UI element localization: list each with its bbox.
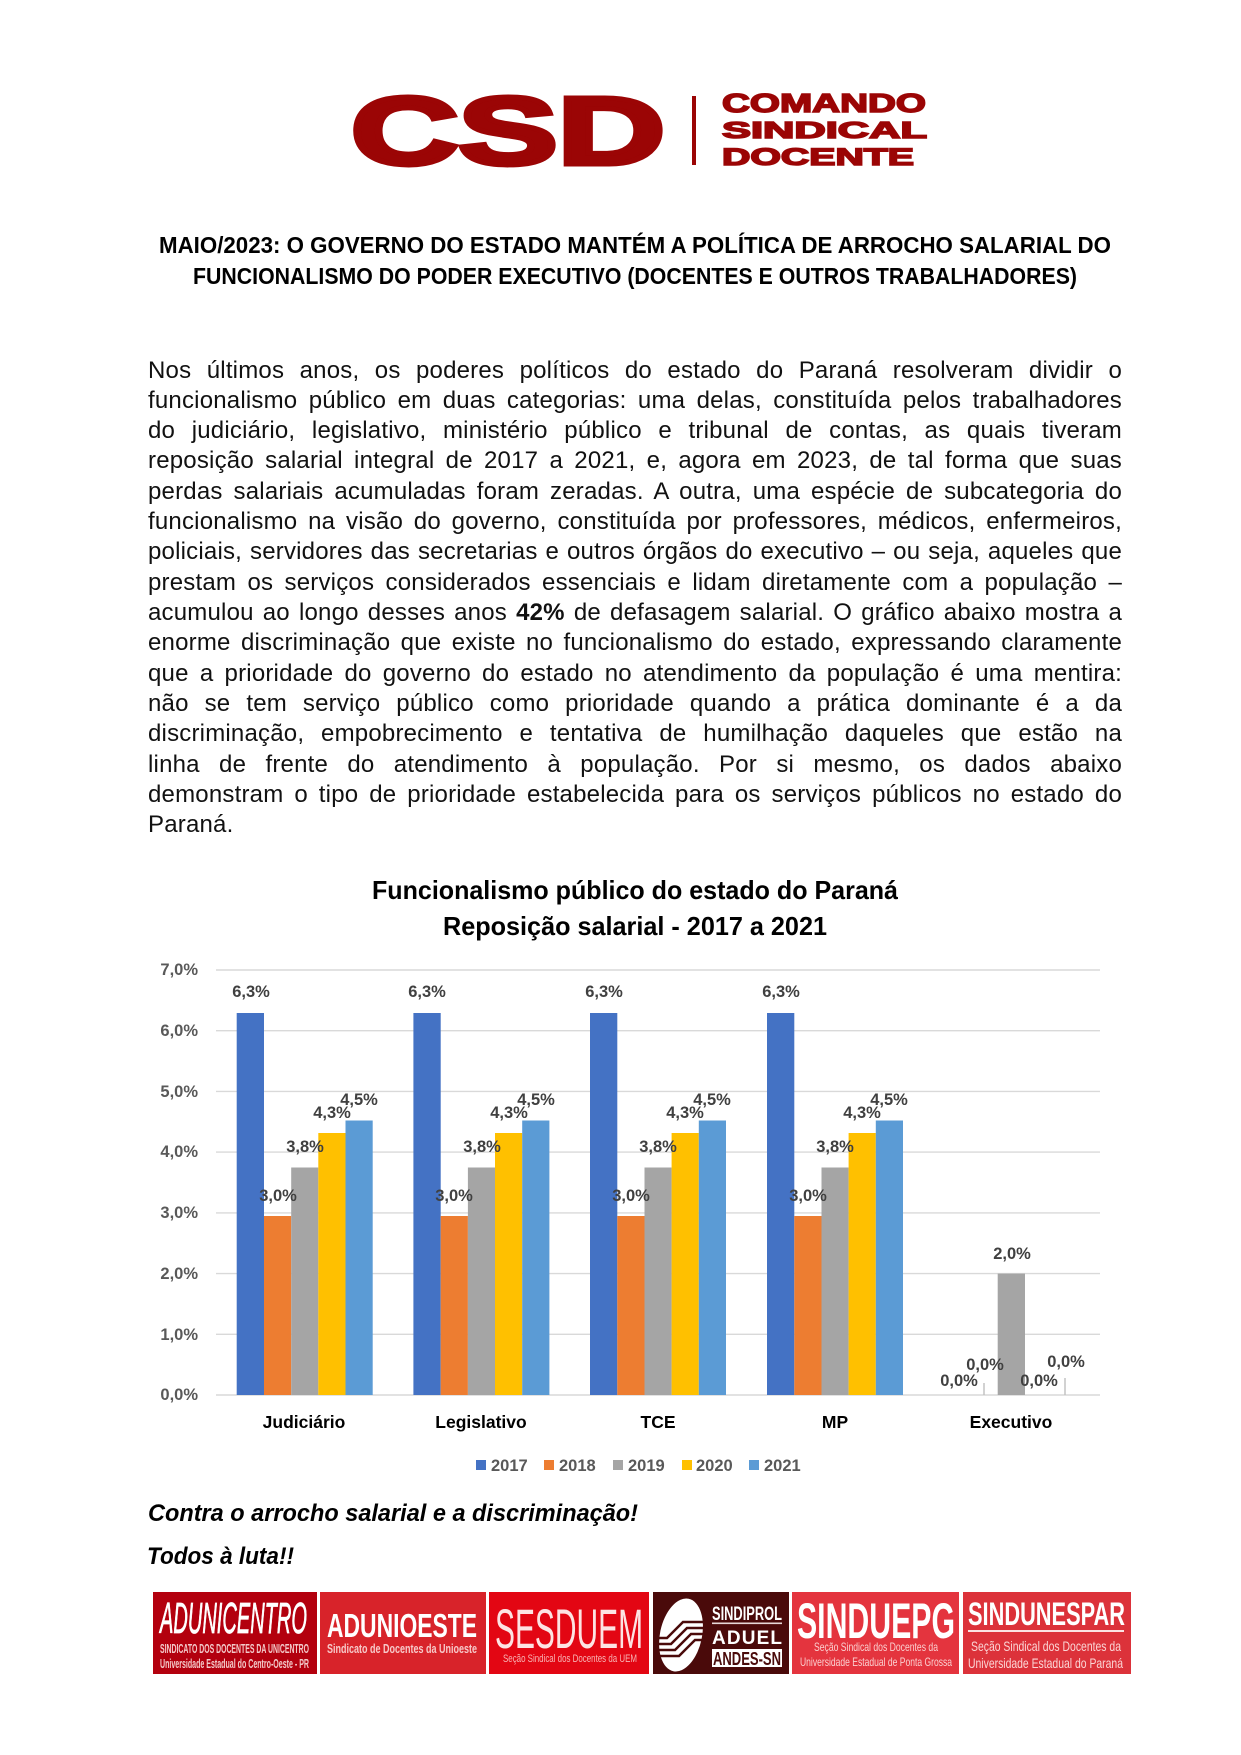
logo: SESDUEM: SESDUEM: [495, 1597, 643, 1660]
logo: SESDUEM: [489, 1592, 649, 1674]
body text paragraph: reposição salarial integral de 2017 a 2021, e, agora em 2023, de tal forma que suas: [148, 447, 1122, 474]
logo: CSD Comando Sindical Docente: [351, 78, 927, 185]
category labels: MP: [822, 1412, 848, 1432]
body text paragraph: não se tem serviço público como prioridade quando a prática dominante é a da: [148, 690, 1122, 717]
legend: 2017: [491, 1457, 528, 1475]
body text paragraph: que a prioridade do governo do estado no atendimento da população é uma mentira:: [148, 660, 1122, 687]
logo: ADUNICENTRO: SINDICATO DOS DOCENTES DA UNICENTRO: [160, 1641, 309, 1656]
closing slogan: Contra o arrocho salarial e a discriminação!: [148, 1500, 638, 1527]
logo: SINDUEPG: Universidade Estadual de Ponta Grossa: [800, 1655, 952, 1669]
data labels: 6,3%: [585, 983, 623, 1001]
body text paragraph: linha de frente do atendimento à população. Por si mesmo, os dados abaixo: [148, 751, 1122, 778]
title heading: FUNCIONALISMO DO PODER EXECUTIVO (DOCENTES E OUTROS TRABALHADORES): [193, 263, 1077, 289]
title heading: MAIO/2023: O GOVERNO DO ESTADO MANTÉM A POLÍTICA DE ARROCHO SALARIAL DO: [159, 231, 1111, 258]
chart title: Reposição salarial - 2017 a 2021: [443, 911, 827, 941]
logo: ADUNIOESTE: [320, 1592, 486, 1674]
y axis labels: 0,0%: [160, 1386, 198, 1404]
y axis labels: 1,0%: [160, 1326, 198, 1344]
logo: SINDIPROL ADUEL ANDES-SN: ANDES-SN: [713, 1649, 781, 1669]
data labels: 4,3%: [490, 1104, 528, 1122]
data labels: 4,3%: [666, 1104, 704, 1122]
data labels: 0,0%: [966, 1356, 1004, 1374]
bars: Executivo: [984, 1274, 1065, 1395]
union logos strip: [153, 1592, 1131, 1676]
category labels: TCE: [640, 1412, 676, 1432]
y axis labels: 3,0%: [160, 1204, 198, 1222]
y axis labels: 7,0%: [160, 961, 198, 979]
title heading: [159, 231, 1111, 289]
data labels: 3,8%: [816, 1138, 854, 1156]
logo: SINDUEPG: [792, 1592, 959, 1674]
chart title: Funcionalismo público do estado do Paraná: [372, 875, 899, 905]
logo: CSD Comando Sindical Docente: SINDICAL: [722, 117, 927, 143]
body text paragraph: prestam os serviços considerados essenciais e lidam diretamente com a população –: [148, 569, 1122, 596]
category labels: Executivo: [970, 1412, 1052, 1432]
body text paragraph: acumulou ao longo desses anos 42% de defasagem salarial. O gráfico abaixo mostra a: [148, 599, 1122, 626]
data labels: 4,3%: [313, 1104, 351, 1122]
data labels: 6,3%: [232, 983, 270, 1001]
logo: SINDIPROL ADUEL ANDES-SN: [653, 1592, 789, 1676]
data labels: 3,0%: [435, 1187, 473, 1205]
logo: SESDUEM: Seção Sindical dos Docentes da UEM: [503, 1653, 637, 1665]
data labels: 0,0%: [1020, 1372, 1058, 1390]
data labels: 4,3%: [843, 1104, 881, 1122]
legend: 2019: [628, 1457, 665, 1475]
closing slogan: Todos à luta!!: [147, 1543, 294, 1570]
data labels: 6,3%: [762, 983, 800, 1001]
body text paragraph: funcionalismo público em duas categorias: uma delas, constituída pelos trabalhadores: [148, 387, 1122, 414]
y axis labels: [160, 961, 198, 1404]
legend: 2021: [764, 1457, 801, 1475]
y axis labels: 2,0%: [160, 1265, 198, 1283]
body text paragraph: [148, 356, 1122, 838]
logo: ADUNIOESTE: Sindicato de Docentes da Unioeste: [327, 1641, 477, 1656]
data labels: 3,0%: [789, 1187, 827, 1205]
data labels: 4,5%: [870, 1091, 908, 1109]
category labels: Judiciário: [263, 1412, 345, 1432]
logo: SINDUNESPAR: [963, 1592, 1131, 1674]
data labels: 4,5%: [340, 1091, 378, 1109]
bars: Legislativo: [413, 1013, 549, 1395]
body text paragraph: Paraná.: [148, 811, 233, 838]
data labels: 3,8%: [463, 1138, 501, 1156]
data labels: 3,8%: [286, 1138, 324, 1156]
data labels: 6,3%: [408, 983, 446, 1001]
data labels: 3,0%: [612, 1187, 650, 1205]
chart title: [372, 875, 899, 941]
body text paragraph: do judiciário, legislativo, ministério público e tribunal de contas, as quais tiveram: [148, 417, 1122, 444]
plot area: [160, 961, 1100, 1475]
data labels: 4,5%: [517, 1091, 555, 1109]
logo: SINDUEPG: Seção Sindical dos Docentes da: [814, 1640, 938, 1654]
category labels: Legislativo: [435, 1412, 527, 1432]
union logos strip: ADUNICENTRO: [159, 1594, 307, 1643]
legend: [476, 1457, 801, 1475]
data labels: 0,0%: [940, 1372, 978, 1390]
bars: MP: [767, 1013, 903, 1395]
body text paragraph: perdas salariais acumuladas foram zeradas. A outra, uma espécie de subcategoria do: [148, 478, 1122, 505]
logo: ADUNICENTRO: Universidade Estadual do Centro-Oeste - PR: [160, 1656, 309, 1671]
logo: SINDUNESPAR: Universidade Estadual do Paraná: [968, 1655, 1123, 1671]
logo: ADUNICENTRO: [153, 1592, 317, 1674]
legend: 2020: [696, 1457, 733, 1475]
y axis labels: 5,0%: [160, 1083, 198, 1101]
data labels: [232, 983, 1085, 1390]
body text paragraph: enorme discriminação que existe no funcionalismo do estado, expressando claramente: [148, 629, 1122, 656]
logo: ADUNIOESTE: ADUNIOESTE: [327, 1607, 477, 1644]
bars: Judiciário: [237, 1013, 373, 1395]
body text paragraph: funcionalismo na visão do governo, constituída por professores, médicos, enfermeiros,: [148, 508, 1122, 535]
y axis labels: 6,0%: [160, 1022, 198, 1040]
bar chart: reposição salarial: [160, 875, 1100, 1475]
body text paragraph: Nos últimos anos, os poderes políticos do estado do Paraná resolveram dividir o: [148, 356, 1122, 384]
category labels: [263, 1412, 1052, 1432]
body text paragraph: discriminação, empobrecimento e tentativa de humilhação daqueles que estão na: [148, 720, 1122, 747]
logo: CSD Comando Sindical Docente: CSD: [351, 78, 665, 185]
data labels: 3,8%: [639, 1138, 677, 1156]
bars: TCE: [590, 1013, 726, 1395]
y axis labels: 4,0%: [160, 1143, 198, 1161]
logo: CSD Comando Sindical Docente: DOCENTE: [722, 144, 914, 171]
closing slogan: [147, 1500, 638, 1570]
legend: 2018: [559, 1457, 596, 1475]
logo: SINDIPROL ADUEL ANDES-SN: SINDIPROL: [712, 1604, 782, 1625]
data labels: 4,5%: [693, 1091, 731, 1109]
logo: SINDUEPG: SINDUEPG: [797, 1593, 955, 1649]
logo: SINDUNESPAR: Seção Sindical dos Docentes da: [971, 1638, 1121, 1654]
data labels: 3,0%: [259, 1187, 297, 1205]
data labels: 2,0%: [993, 1245, 1031, 1263]
logo: CSD Comando Sindical Docente: COMANDO: [722, 88, 926, 118]
data labels: 0,0%: [1047, 1353, 1085, 1371]
logo: SINDUNESPAR: SINDUNESPAR: [968, 1596, 1125, 1632]
body text paragraph: policiais, servidores das secretarias e outros órgãos do executivo – ou seja, aqueles que: [148, 538, 1122, 565]
body text paragraph: demonstram o tipo de prioridade estabelecida para os serviços públicos no estado do: [148, 781, 1122, 808]
logo: SINDIPROL ADUEL ANDES-SN: ADUEL: [712, 1628, 782, 1649]
